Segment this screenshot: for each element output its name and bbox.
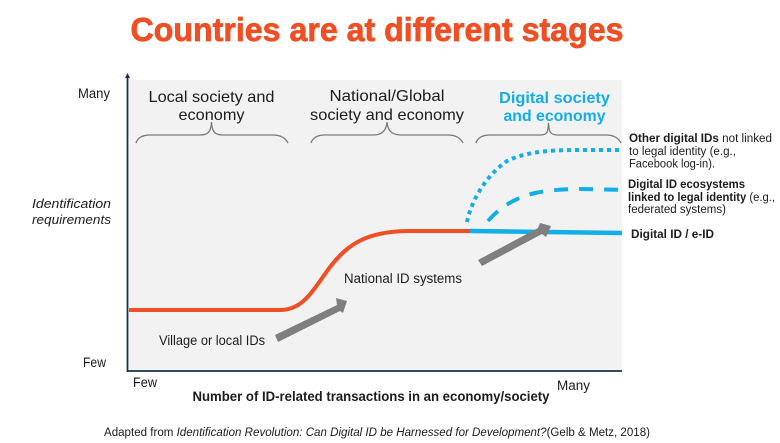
x axis title: Number of ID-related transactions in an economy/society — [192, 389, 550, 404]
curve: national and local id path — [129, 231, 470, 310]
brace: local — [136, 122, 288, 143]
label: other digital ids — [629, 133, 772, 170]
label: digital id / e-id: Digital ID / e-ID — [631, 229, 714, 241]
label: digital id ecosystems: Digital ID ecosystems — [628, 179, 745, 191]
heading: national/global society: National/Global — [330, 88, 444, 105]
x axis — [127, 370, 622, 372]
source note: Adapted from Identification Revolution: Can Digital ID be Harnessed for Development?(Gelb & Metz, 2018) — [104, 427, 650, 439]
y axis title — [32, 196, 112, 227]
heading: local society: Local society and — [148, 89, 274, 106]
y axis title: requirements — [32, 212, 112, 227]
label: digital id ecosystems: federated systems) — [628, 204, 726, 216]
heading: local society: economy — [178, 107, 244, 124]
panel: chart background — [129, 80, 622, 371]
y axis label: many: Many — [78, 86, 110, 101]
x axis label: many: Many — [557, 378, 590, 393]
y axis title: Identification — [32, 196, 111, 211]
curve: digital id ecosystems dashed — [488, 189, 628, 221]
heading: digital society: Digital society — [499, 90, 610, 107]
heading: digital society: and economy — [504, 108, 606, 125]
brace: digital — [476, 123, 621, 143]
arrow: towards digital id — [478, 223, 551, 266]
label: national id systems: National ID systems — [344, 271, 462, 286]
label: other digital ids: Other digital IDs not linked — [629, 133, 772, 145]
label: digital id ecosystems — [628, 179, 775, 216]
arrow: towards national id — [275, 298, 347, 342]
title: Countries are at different stages — [130, 11, 624, 48]
x axis label: few: Few — [133, 375, 157, 390]
heading: national/global society — [310, 88, 464, 124]
curve: other digital ids dotted — [467, 150, 622, 222]
y axis — [125, 73, 130, 372]
label: digital id ecosystems: linked to legal identity (e.g., — [628, 192, 775, 204]
label: village or local ids: Village or local IDs — [159, 333, 265, 348]
heading: local society — [148, 89, 274, 124]
label: other digital ids: Facebook log-in). — [629, 158, 715, 170]
line: digital id — [470, 231, 622, 233]
heading: digital society — [499, 90, 610, 125]
heading: national/global society: society and economy — [310, 107, 464, 124]
y axis label: few: Few — [83, 355, 106, 370]
label: other digital ids: to legal identity (e.g., — [629, 146, 736, 158]
brace: national — [311, 122, 463, 143]
